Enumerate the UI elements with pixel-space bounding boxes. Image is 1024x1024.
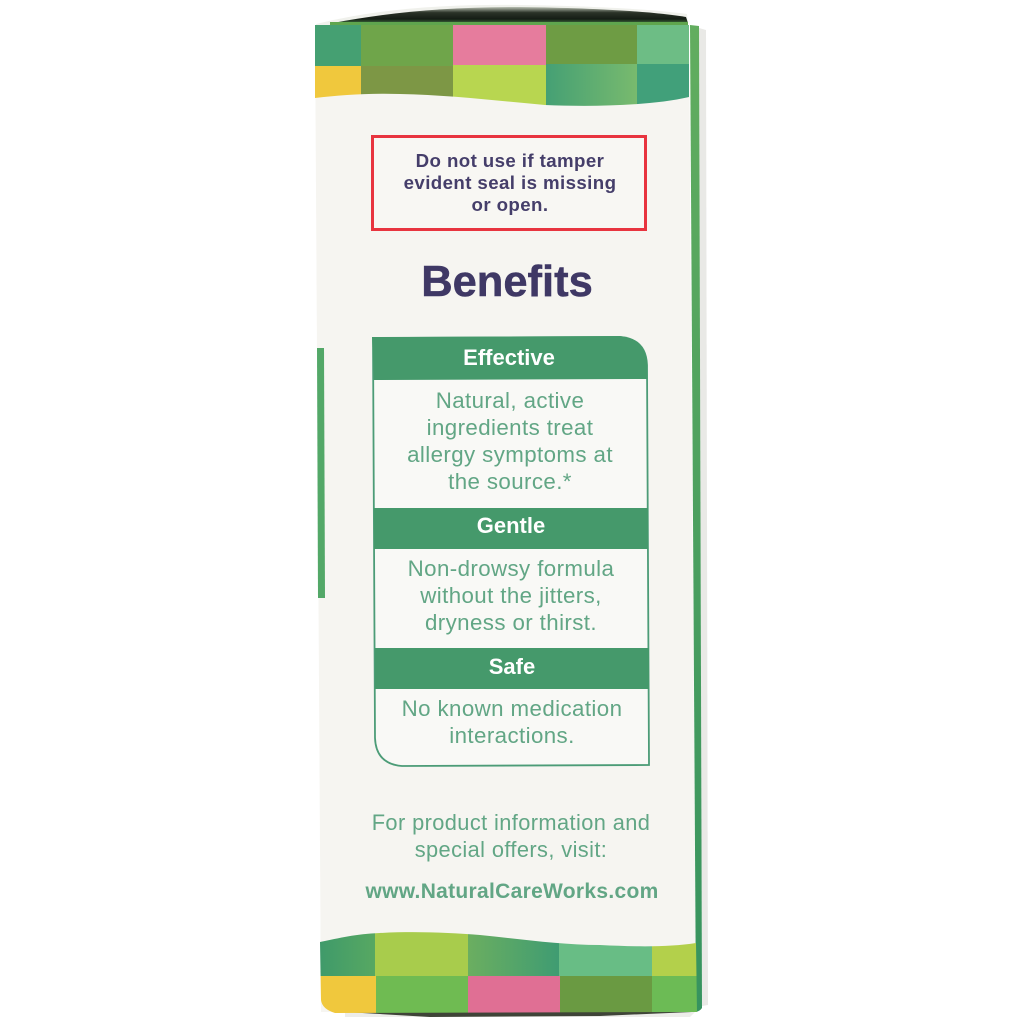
text: gentle description: dryness or thirst. — [425, 610, 597, 635]
header: Safe: Safe — [489, 654, 535, 679]
box body — [315, 5, 708, 1017]
warning text: Do not use if tamper — [416, 150, 604, 171]
text: effective description — [407, 388, 613, 494]
text: safe description: No known medication — [402, 696, 622, 721]
heading: Benefits: Benefits — [421, 258, 593, 306]
warning text — [404, 150, 616, 215]
text: gentle description: without the jitters, — [420, 583, 602, 608]
header: Gentle — [374, 508, 648, 549]
website url: www.NaturalCareWorks.com — [365, 880, 659, 903]
benefits table outline — [373, 337, 649, 766]
header: Gentle: Gentle — [477, 513, 545, 538]
text: effective description: ingredients treat — [427, 415, 593, 440]
header: Safe — [375, 648, 649, 689]
product box — [315, 5, 708, 1017]
product information text — [372, 810, 650, 862]
text: safe description: interactions. — [449, 723, 575, 748]
warning text: or open. — [472, 194, 548, 215]
warning box — [371, 135, 647, 231]
product information text: special offers, visit: — [415, 837, 607, 862]
text: safe description — [402, 696, 622, 748]
bottom colour pattern — [320, 930, 697, 1014]
text: gentle description — [408, 556, 614, 635]
header: Effective: Effective — [463, 345, 555, 370]
text: effective description: allergy symptoms at — [407, 442, 613, 467]
top right header corner — [372, 336, 648, 380]
text: effective description: Natural, active — [436, 388, 584, 413]
product information text: For product information and — [372, 810, 650, 835]
top colour pattern — [315, 25, 690, 106]
warning text: evident seal is missing — [404, 172, 616, 193]
text: gentle description: Non-drowsy formula — [408, 556, 614, 581]
text: effective description: the source.* — [448, 469, 572, 494]
